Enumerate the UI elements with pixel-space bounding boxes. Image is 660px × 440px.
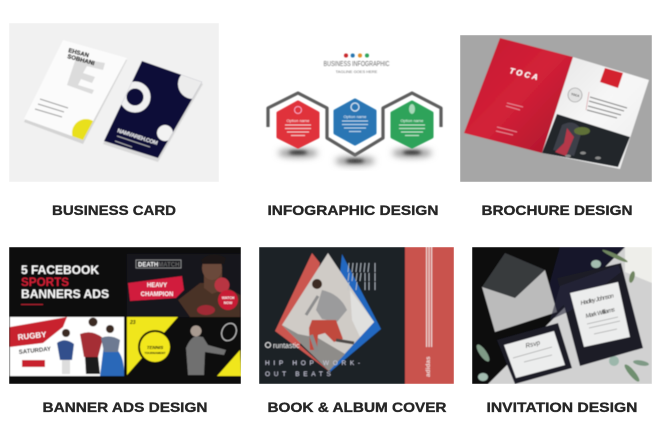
cover slogan: HIP HOP WORK- — [265, 360, 364, 367]
tennis banner — [127, 317, 241, 376]
tennis banner: TENNIS — [147, 345, 163, 350]
panel: banner ads image — [9, 247, 241, 384]
facebook banner heading — [21, 265, 109, 304]
tagline: TAGLINE GOES HERE — [336, 69, 378, 74]
blue hexagon — [335, 100, 375, 144]
green hexagon: Option name — [401, 118, 424, 123]
facebook banner heading: SPORTS — [21, 277, 69, 289]
boxing banner: DEATHMATCH — [138, 262, 179, 268]
short white tick marks — [348, 263, 375, 290]
header dots — [344, 54, 369, 58]
red side band: adidas — [425, 356, 432, 377]
red cover — [464, 38, 573, 153]
panel: infographic image — [268, 54, 441, 165]
envelope — [482, 253, 557, 332]
white card: EHSAN — [67, 48, 89, 59]
panel: business card image — [9, 23, 219, 182]
green hexagon — [392, 102, 432, 147]
rugby banner — [10, 317, 124, 376]
boxing banner: NOW — [224, 301, 233, 305]
tennis banner: TOURNAMENT — [144, 351, 166, 355]
red hexagon — [278, 102, 318, 147]
panel: book and album cover image — [259, 247, 454, 384]
outline line — [268, 93, 441, 155]
panel: brochure image — [460, 35, 652, 182]
RSVP card: Rsvp — [525, 339, 541, 350]
red hexagon: Option name — [287, 118, 310, 123]
facebook banner heading: 5 FACEBOOK — [21, 265, 100, 277]
red side band — [405, 247, 454, 384]
blue hexagon: Option name — [344, 114, 367, 119]
RSVP card — [497, 323, 572, 384]
cover slogan — [265, 360, 364, 378]
white inner page — [542, 57, 649, 169]
leaves — [474, 248, 649, 383]
white inner page: TOCA — [571, 92, 581, 98]
navy card — [103, 61, 208, 162]
panel: invitation image — [472, 247, 652, 384]
white card — [24, 40, 127, 147]
main invitation card — [550, 263, 643, 366]
triangles with runner — [275, 253, 381, 372]
boxing banner — [127, 254, 241, 317]
white card: SOBHANI — [66, 54, 95, 67]
cover slogan: OUT BEATS — [265, 371, 335, 378]
rugby banner: SATURDAY — [19, 347, 51, 356]
tennis banner: 23 — [129, 320, 136, 326]
red cover: TOCA — [509, 66, 539, 82]
title: book and album cover: BOOK & ALBUM COVER — [268, 399, 446, 415]
title: brochure design: BROCHURE DESIGN — [482, 202, 632, 218]
navy card: NAMVAREH.COM — [116, 128, 159, 147]
boxing banner: WATCH — [222, 296, 235, 300]
main invitation card: Hadley Johnson — [580, 293, 615, 307]
boxing banner: HEAVY — [147, 283, 167, 289]
shadows — [278, 149, 432, 165]
infographic heading: BUSINESS INFOGRAPHIC — [324, 61, 390, 68]
facebook banner heading: BANNERS ADS — [21, 289, 109, 301]
title: banner ads design: BANNER ADS DESIGN — [42, 399, 208, 415]
main invitation card: Mark Williams — [585, 307, 616, 320]
title: business card: BUSINESS CARD — [52, 202, 176, 218]
title: invitation design: INVITATION DESIGN — [486, 399, 638, 415]
rugby banner: RUGBY — [17, 330, 48, 342]
boxing banner: CHAMPION — [141, 292, 173, 298]
runtastic logo: runtastic — [273, 343, 300, 350]
title: infographic design: INFOGRAPHIC DESIGN — [268, 202, 438, 218]
